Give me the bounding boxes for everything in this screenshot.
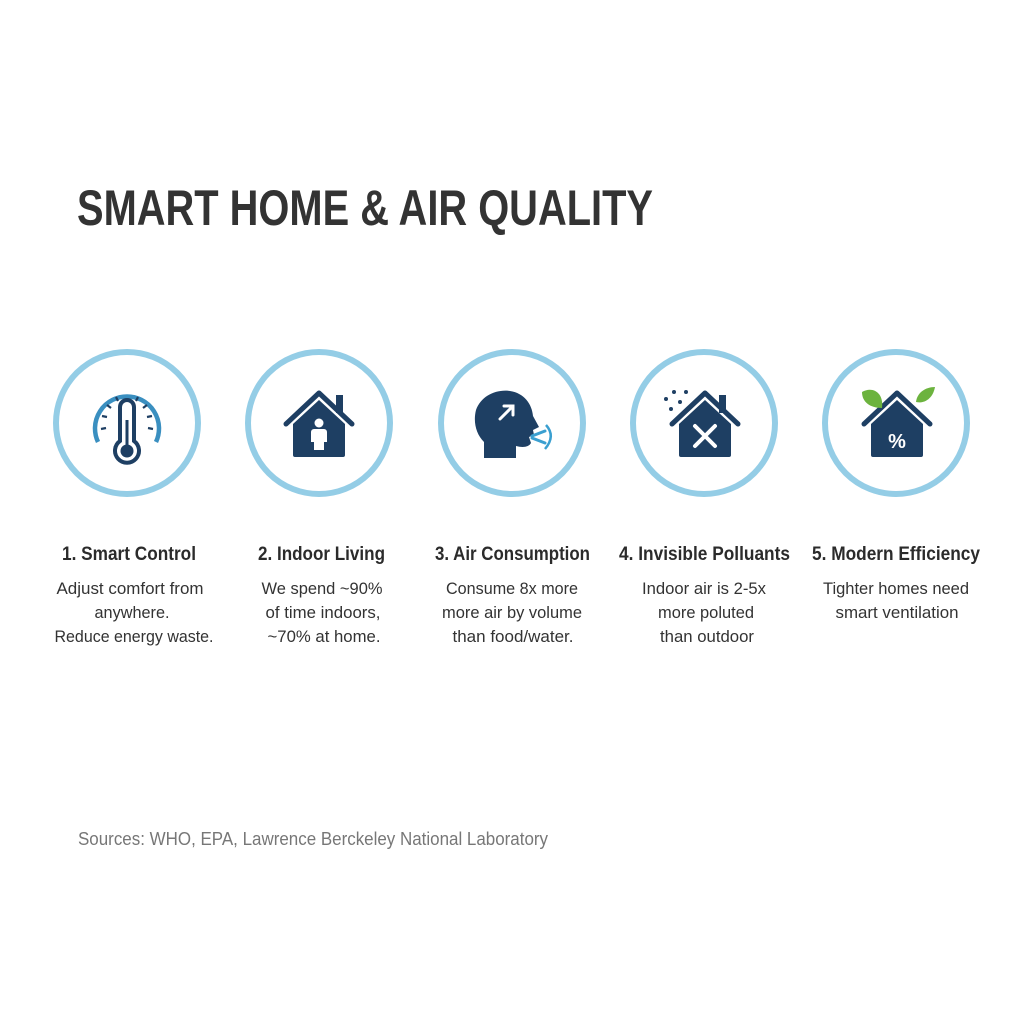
body text: anywhere. bbox=[94, 603, 170, 622]
body text: more air by volume bbox=[442, 603, 582, 622]
panel: air consumption bbox=[435, 352, 590, 646]
heading: 4. Invisible Polluants bbox=[619, 544, 790, 565]
body text bbox=[54, 579, 214, 646]
body text bbox=[823, 579, 969, 622]
body text: ~70% at home. bbox=[268, 627, 380, 646]
body text: than outdoor bbox=[660, 627, 754, 646]
body text: than food/water. bbox=[452, 627, 574, 646]
body text bbox=[642, 579, 766, 646]
body text: Indoor air is 2-5x bbox=[642, 579, 766, 598]
panel: invisible pollutants bbox=[619, 352, 790, 646]
body text: more poluted bbox=[658, 603, 754, 622]
body text: Consume 8x more bbox=[446, 579, 578, 598]
body text bbox=[262, 579, 382, 646]
title: SMART HOME & AIR QUALITY bbox=[77, 180, 653, 236]
panel: indoor living bbox=[248, 352, 390, 646]
icon circle: house with percent and leaves bbox=[825, 352, 967, 494]
body text: We spend ~90% bbox=[262, 579, 382, 598]
panel: smart control bbox=[54, 352, 214, 646]
panel: modern efficiency bbox=[812, 352, 980, 622]
body text: Adjust comfort from bbox=[56, 579, 204, 598]
icon circle: house with percent and leaves: % bbox=[888, 431, 906, 453]
body text: Reduce energy waste. bbox=[54, 627, 214, 646]
icon circle: thermometer bbox=[56, 352, 198, 494]
body text: smart ventilation bbox=[836, 603, 958, 622]
body text bbox=[442, 579, 582, 646]
body text: Tighter homes need bbox=[823, 579, 969, 598]
icon circle: house with X and particles bbox=[633, 352, 775, 494]
body text: of time indoors, bbox=[266, 603, 380, 622]
sources: Sources: WHO, EPA, Lawrence Berckeley National Laboratory bbox=[78, 829, 548, 849]
icon circle: house with person bbox=[248, 352, 390, 494]
icon circle: head breathing bbox=[441, 352, 583, 494]
heading: 2. Indoor Living bbox=[258, 544, 385, 565]
heading: 5. Modern Efficiency bbox=[812, 544, 980, 565]
heading: 1. Smart Control bbox=[62, 544, 196, 565]
heading: 3. Air Consumption bbox=[435, 544, 590, 565]
